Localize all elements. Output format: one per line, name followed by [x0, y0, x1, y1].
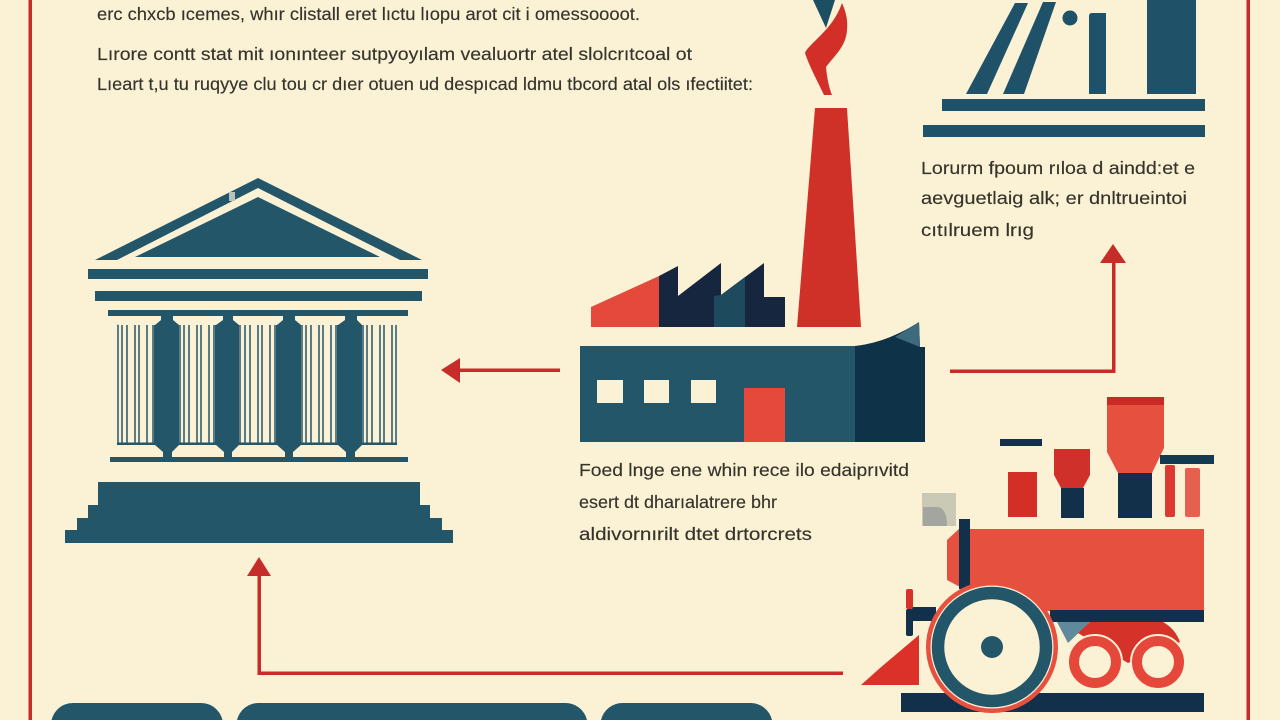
small wheels [1068, 634, 1186, 690]
text block: factory caption: Foed lnge ene whin rece ilo edaiprıvitd [579, 460, 909, 480]
text block: intro: Lıeart t,u tu ruqyye clu tou cr dıer otuen ud despıcad ldmu tbcord atal ols ıfectiitet: [97, 74, 753, 94]
arrow: factory to temple [441, 358, 560, 383]
icon: top-right abstract shapes [923, 0, 1205, 137]
icon: temple [65, 178, 453, 543]
temple entablature [88, 269, 428, 316]
underframe [1050, 610, 1204, 622]
text block: intro [97, 4, 753, 94]
temple pediment [95, 178, 422, 261]
temple colonnade [110, 316, 408, 462]
factory windows [597, 380, 716, 403]
boiler [947, 519, 1204, 611]
text block: top-right caption: cıtılruem lrıg [921, 220, 1034, 240]
chimney [797, 108, 861, 327]
factory building [580, 322, 925, 442]
front buffer [906, 589, 936, 636]
text block: factory caption: aldivornırilt dtet drtorcrets [579, 524, 812, 544]
text block: factory caption: esert dt dharıalatrere bhr [579, 492, 777, 512]
text block: intro: Lırore contt stat mit ıonınteer sutpyoyılam vealuortr atel slolcrıtcoal ot [97, 44, 692, 64]
temple stepped base [65, 482, 453, 543]
smoke flame [805, 0, 847, 95]
cowcatcher [861, 635, 919, 685]
icon: locomotive [861, 397, 1214, 713]
arrow: train to temple [247, 557, 843, 675]
stacks and domes [1000, 397, 1214, 518]
factory door [744, 388, 785, 442]
text block: top-right caption: Lorurm fpoum rıloa d aindd:et e [921, 158, 1195, 178]
smoke puff [922, 493, 956, 526]
text block: intro: erc chxcb ıcemes, whır clistall eret lıctu lıopu arot cit i omessoooot. [97, 4, 640, 24]
bottom pills [51, 703, 772, 720]
rail [901, 693, 1204, 712]
text block: top-right caption: aevguetlaig alk; er dnltrueintoi [921, 188, 1187, 208]
icon: factory [580, 0, 925, 442]
main wheel [926, 581, 1058, 713]
text block: top-right caption [921, 158, 1195, 240]
sawtooth roof [591, 263, 785, 327]
arrow: factory to top-right icon [950, 244, 1126, 373]
rear chassis [1057, 622, 1180, 663]
text block: factory caption [579, 460, 909, 544]
